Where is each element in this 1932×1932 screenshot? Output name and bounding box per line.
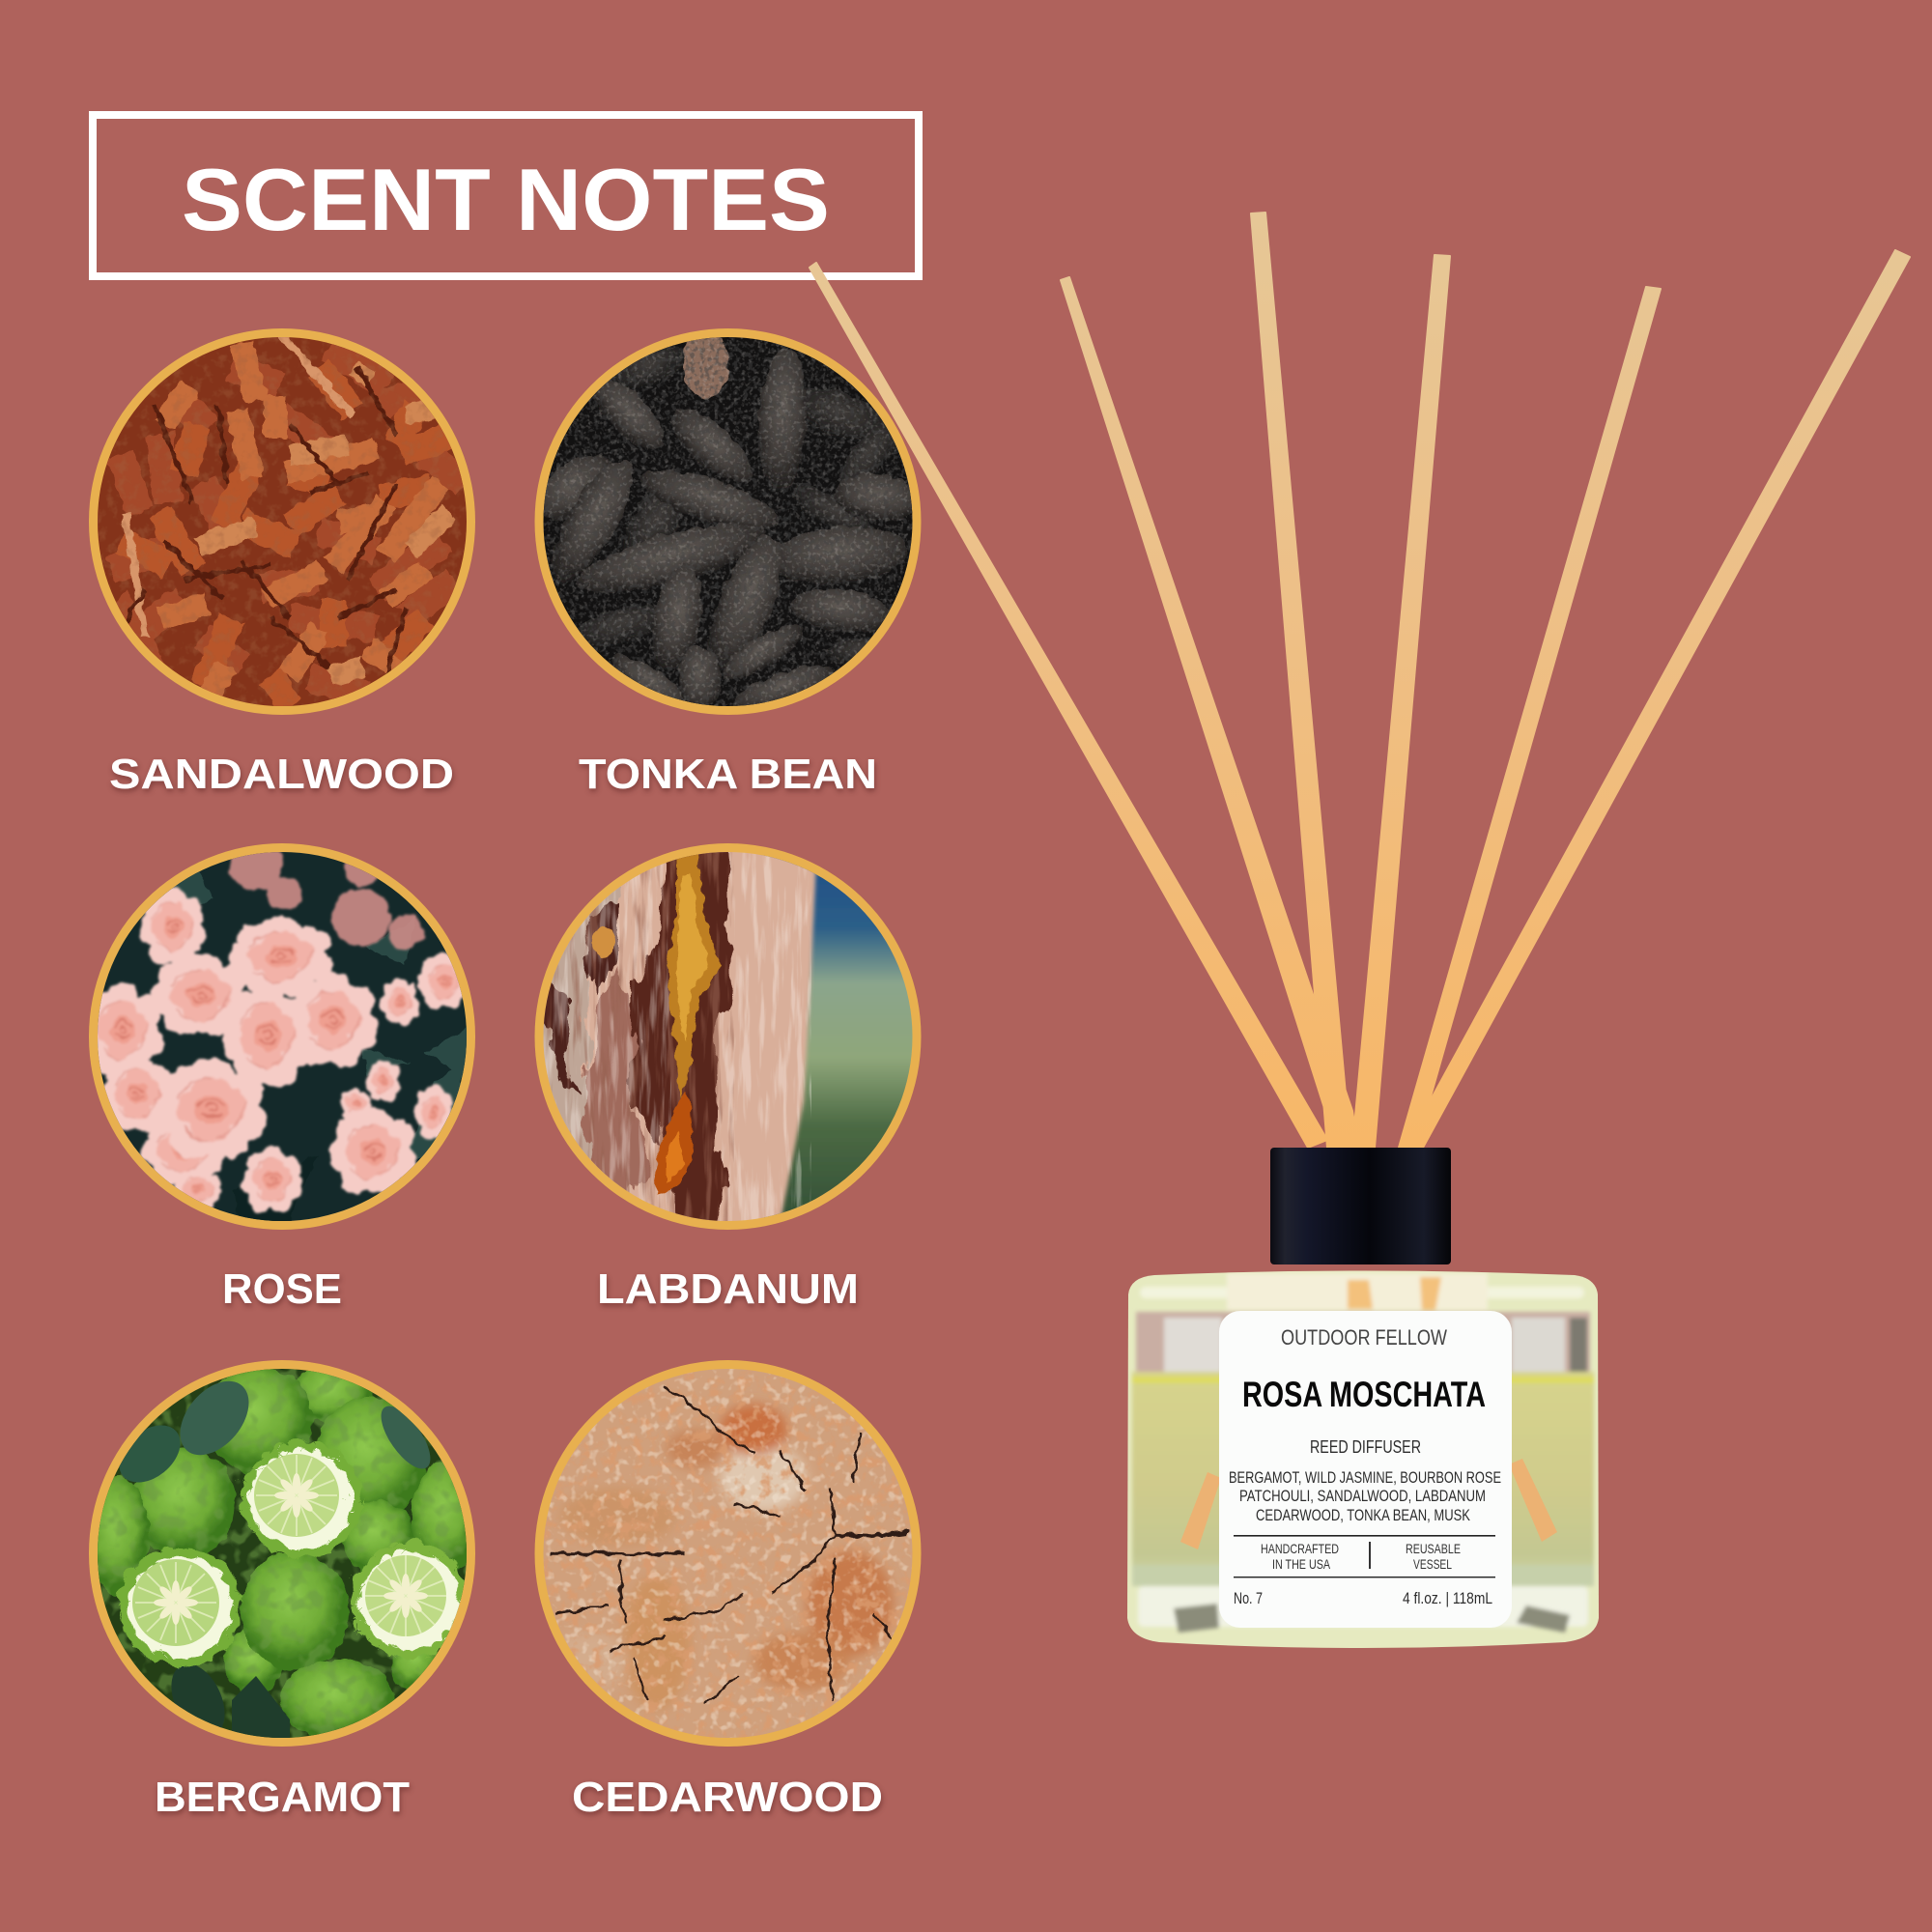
product name: ROSA MOSCHATA — [1242, 1375, 1486, 1414]
panel: bergamot photo — [87, 1360, 481, 1748]
handcrafted note: HANDCRAFTED — [1261, 1541, 1339, 1556]
reusable note: VESSEL — [1413, 1556, 1452, 1572]
reusable note — [1406, 1541, 1461, 1572]
title box: scent notes: SCENT NOTES — [182, 152, 830, 249]
ingredient list: PATCHOULI, SANDALWOOD, LABDANUM — [1239, 1487, 1486, 1505]
reeds through liquid — [1180, 1459, 1557, 1549]
panel: cedarwood photo — [535, 1360, 922, 1748]
number: No. 7 — [1234, 1589, 1263, 1607]
reed sticks — [810, 213, 1910, 1148]
panel: tonka bean photo — [524, 328, 924, 720]
volume: 4 fl.oz. | 118mL — [1403, 1589, 1492, 1607]
label: sandalwood: SANDALWOOD — [109, 751, 454, 798]
ingredient list — [1229, 1468, 1501, 1524]
label: labdanum: LABDANUM — [597, 1265, 859, 1313]
label: rose: ROSE — [222, 1265, 342, 1313]
panel: sandalwood photo — [89, 328, 475, 715]
handcrafted note — [1261, 1541, 1339, 1572]
reusable note: REUSABLE — [1406, 1541, 1461, 1556]
ingredient list: BERGAMOT, WILD JASMINE, BOURBON ROSE — [1229, 1468, 1501, 1487]
label: bergamot: BERGAMOT — [155, 1774, 410, 1821]
panel: labdanum photo — [535, 843, 922, 1230]
product label — [1219, 1311, 1512, 1628]
ingredient list: CEDARWOOD, TONKA BEAN, MUSK — [1256, 1506, 1470, 1524]
black cap — [1270, 1148, 1451, 1264]
title box: scent notes — [93, 115, 919, 276]
product: reed diffuser bottle — [1121, 1148, 1604, 1662]
product type: REED DIFFUSER — [1310, 1437, 1421, 1457]
bottle glass — [1121, 1256, 1604, 1662]
handcrafted note: IN THE USA — [1272, 1556, 1331, 1572]
label: tonka bean: TONKA BEAN — [579, 751, 877, 798]
panel: rose photo — [82, 838, 475, 1230]
brand name: OUTDOOR FELLOW — [1281, 1325, 1447, 1350]
label: cedarwood: CEDARWOOD — [572, 1774, 883, 1821]
